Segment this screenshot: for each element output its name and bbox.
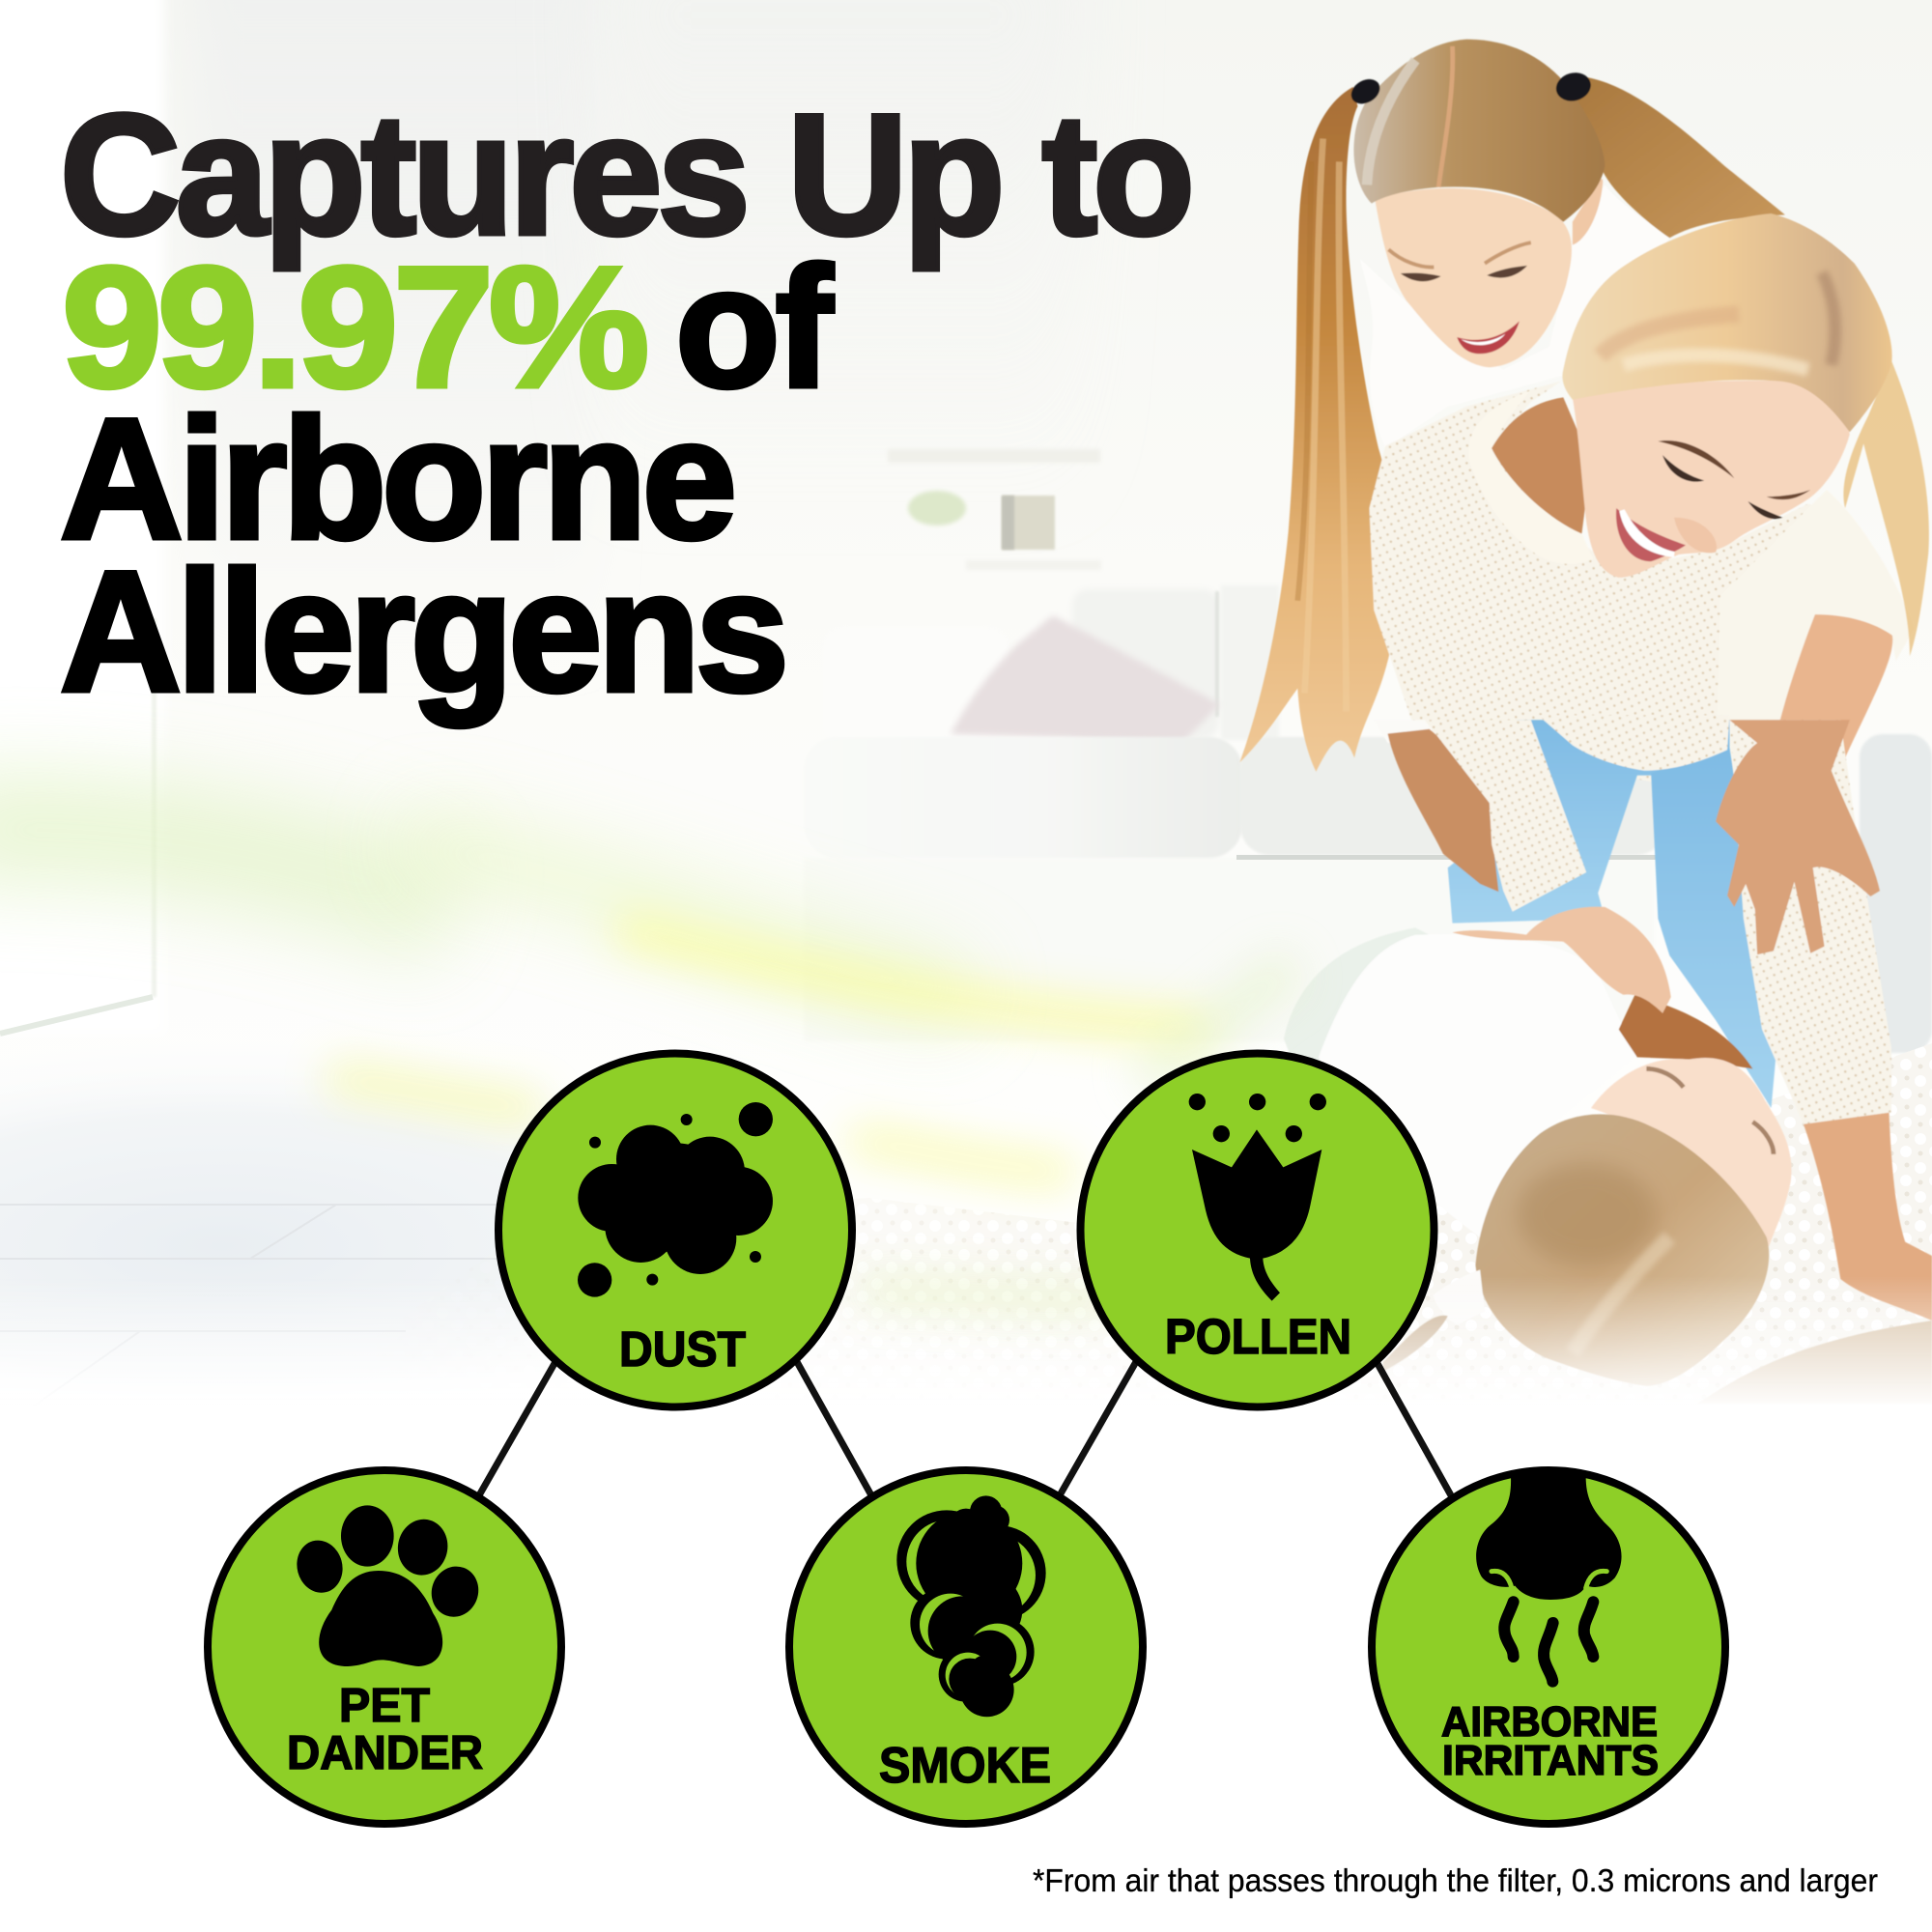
title line 4: Allergens <box>60 535 784 727</box>
forearm and hand on carpet <box>1804 1113 1932 1321</box>
child's hair <box>1475 1114 1769 1386</box>
icon: dust cloud <box>578 1102 773 1297</box>
photo: lower bodies and the child lying on the carpet <box>1284 715 1932 1404</box>
footnote: *From air that passes through the filter, 0.3 microns and larger <box>1033 1862 1878 1898</box>
girl's hair dome <box>1353 40 1605 222</box>
green and yellow air-flow haze <box>0 829 1294 1299</box>
mother's sweater torso <box>1369 382 1891 785</box>
mother's sleeve and forearm <box>1716 490 1915 757</box>
child's jeans edge and white hoodie <box>1284 927 1637 1237</box>
soft white fade of the photo into the page <box>0 1275 1932 1932</box>
left hand on sleeve <box>1374 720 1548 892</box>
child's neck and shoulder <box>1619 995 1752 1068</box>
title line 2: green percentage: 99.97% <box>62 231 645 423</box>
label: pet dander: DANDER <box>287 1727 483 1779</box>
label: pet dander: PET <box>339 1680 430 1732</box>
girl's face <box>1375 179 1603 367</box>
photo: girl on her mother's back (upper figures) <box>1239 40 1929 785</box>
badge: pollen <box>1080 1053 1434 1406</box>
girl's left pigtail <box>1239 87 1401 772</box>
label: pollen: POLLEN <box>1165 1309 1351 1364</box>
mother's collar <box>1468 390 1593 564</box>
sofa <box>804 585 1932 1053</box>
mother's neck <box>1492 397 1591 533</box>
badge: airborne irritants <box>1372 1470 1725 1824</box>
icon: smoke puff <box>896 1495 1046 1717</box>
hand on the child's shoulder <box>1452 907 1671 1013</box>
mother's hair <box>1562 213 1892 432</box>
child's hair trailing on carpet <box>1383 1316 1932 1404</box>
badge: dust <box>498 1053 852 1406</box>
shelf with plant and books <box>888 449 1101 570</box>
mother's face <box>1573 381 1850 578</box>
hair ties <box>1347 69 1594 109</box>
label: airborne irritants: AIRBORNE <box>1441 1698 1658 1746</box>
badge: smoke <box>789 1470 1143 1824</box>
icon: tulip with pollen <box>1189 1094 1326 1301</box>
mother's hair strands right <box>1843 360 1929 656</box>
connector lines between circles <box>479 1360 1451 1495</box>
label: smoke: SMOKE <box>879 1738 1051 1794</box>
label: airborne irritants: IRRITANTS <box>1442 1737 1659 1784</box>
knit leg panel <box>1729 720 1891 1124</box>
title <box>60 78 1190 727</box>
title line 2: of: of <box>675 231 834 423</box>
girl's right pigtail <box>1573 76 1785 238</box>
label: airborne irritants <box>1441 1698 1659 1784</box>
jeans <box>1448 720 1776 1108</box>
badge: pet dander <box>208 1470 561 1824</box>
title line 1: Captures Up to <box>60 78 1190 270</box>
title line 3: Airborne <box>60 383 732 575</box>
left knit sleeve <box>1425 720 1586 912</box>
right arm and hand <box>1716 720 1880 954</box>
icon: paw print <box>291 1505 486 1666</box>
sweater hem <box>1538 715 1729 771</box>
label: dust: DUST <box>619 1321 746 1377</box>
floor tiles <box>0 1024 840 1468</box>
scrunchie <box>1433 1269 1485 1325</box>
carpet <box>846 1043 1932 1370</box>
girl's white sweater <box>1360 185 1669 448</box>
child's face <box>1591 1058 1791 1246</box>
left window and wall <box>0 0 1082 1034</box>
label: pet dander <box>287 1680 483 1779</box>
icon: nose with fumes <box>1476 1471 1622 1682</box>
